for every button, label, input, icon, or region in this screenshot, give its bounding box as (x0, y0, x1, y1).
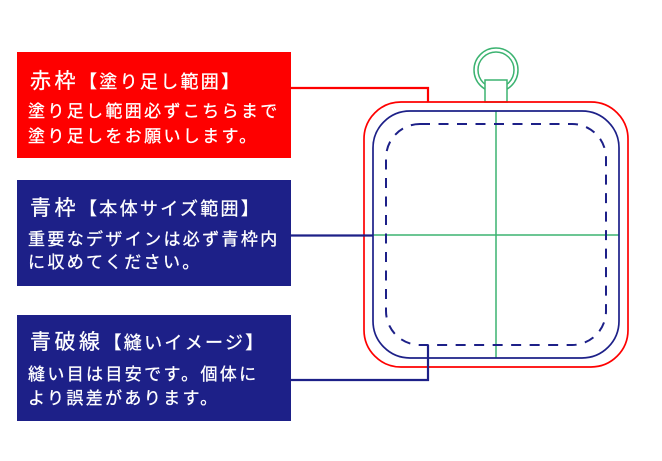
panel: blue frame explanation (17, 180, 291, 286)
arrow: red frame leader (291, 88, 428, 102)
text: stitching note: 縫い目は目安です。個体に (28, 365, 258, 384)
icon: key ring (474, 48, 518, 102)
center guide lines (373, 111, 619, 358)
text: body area instructions: 重要なデザインは必ず青枠内 (28, 229, 280, 249)
blue dashed stitch outline (386, 124, 606, 345)
arrow: dashed line leader (291, 345, 428, 380)
panel: red frame explanation (17, 52, 291, 158)
heading: red frame: 赤枠【塗り足し範囲】 (30, 70, 241, 93)
text: bleed instructions: 塗り足しをお願いします。 (28, 127, 258, 146)
panel: blue dashed line explanation (17, 315, 291, 421)
diagram: keychain template (364, 48, 628, 367)
text: bleed instructions: 塗り足し範囲必ずこちらまで (28, 102, 280, 121)
heading: blue frame: 青枠【本体サイズ範囲】 (30, 197, 261, 220)
blue body outline (373, 111, 619, 358)
arrow: blue frame leader (291, 234, 373, 237)
red bleed outline (364, 102, 628, 367)
text: body area instructions: に収めてください。 (28, 253, 202, 272)
text: stitching note: より誤差があります。 (28, 389, 219, 408)
heading: blue dashed line: 青破線【縫いイメージ】 (30, 331, 266, 354)
